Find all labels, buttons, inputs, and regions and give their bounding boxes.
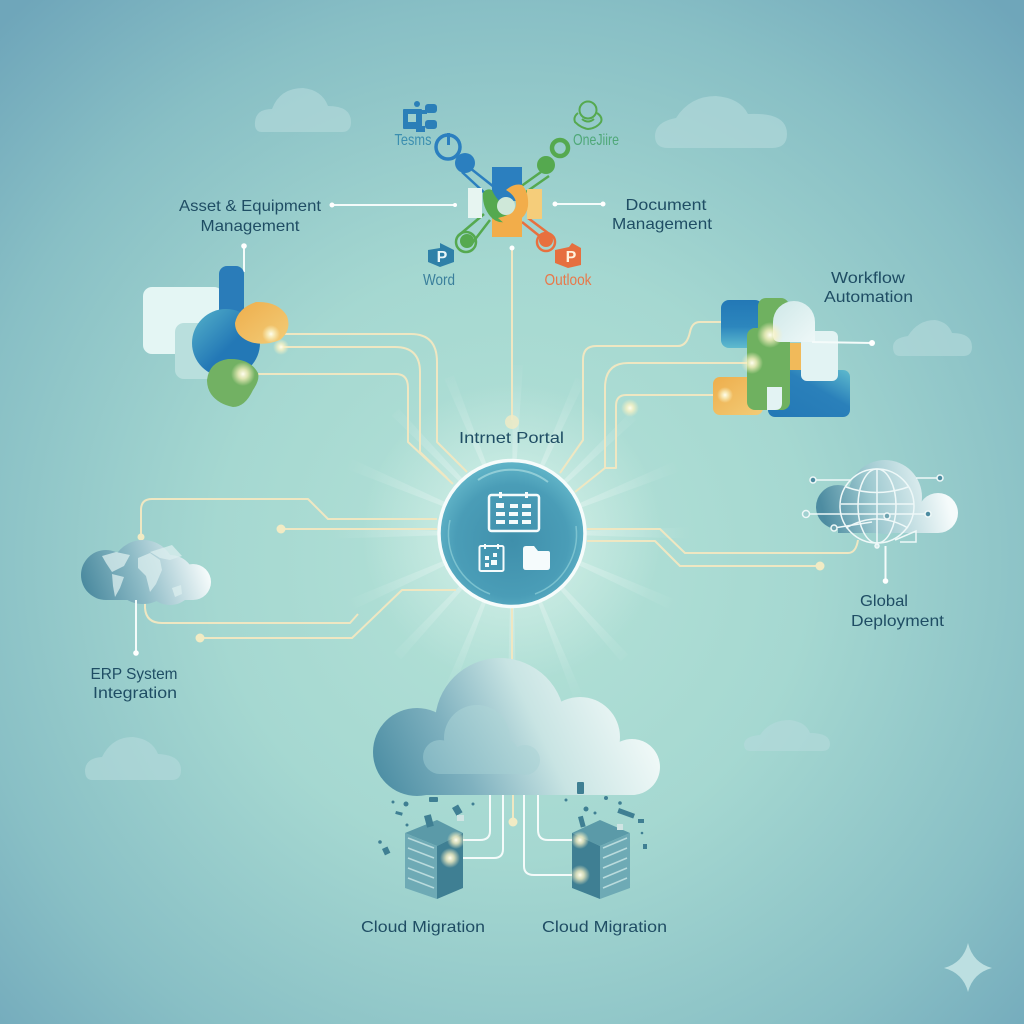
label: ERP System Integration: ERP System bbox=[90, 666, 178, 683]
traces: upper right bbox=[560, 322, 721, 473]
traces: upper left bbox=[271, 334, 467, 472]
label: Global Deployment: Global bbox=[860, 593, 908, 610]
server connector lines bbox=[450, 795, 580, 875]
label: Outlook: Outlook bbox=[544, 272, 592, 289]
light rays from hub bbox=[324, 365, 700, 721]
icon: connector nodes bbox=[436, 133, 568, 252]
trace: to top hub bbox=[511, 248, 513, 420]
label: Word: Word bbox=[423, 272, 455, 289]
cloud: bottom left bbox=[85, 737, 181, 780]
label: ERP System Integration: Integration bbox=[93, 685, 177, 702]
label: Teams: Tesms bbox=[394, 132, 432, 149]
label: Workflow Automation: Workflow bbox=[831, 270, 905, 287]
icon: large cloud bbox=[373, 658, 660, 796]
label: Cloud Migration left: Cloud Migration bbox=[361, 919, 485, 936]
label: Asset & Equipment Management: Management bbox=[200, 218, 300, 235]
line: portal top dot bbox=[510, 246, 514, 250]
icon group: Workflow Automation bbox=[713, 298, 875, 417]
cloud: bottom right bbox=[744, 720, 830, 751]
icon: Word bbox=[428, 243, 454, 267]
icon: folder bbox=[523, 546, 550, 570]
icon group: Asset & Equipment bbox=[143, 243, 289, 407]
label: Document Management: Document bbox=[626, 197, 707, 214]
label: Workflow Automation bbox=[824, 270, 913, 306]
line: document label connector bbox=[552, 202, 606, 206]
world map continents bbox=[102, 545, 182, 597]
circuit traces bbox=[138, 248, 858, 660]
cloud: top right bbox=[655, 96, 787, 148]
background clouds bbox=[85, 88, 972, 780]
inner cloud bbox=[423, 705, 540, 775]
label: OneDrive: OneJiire bbox=[573, 132, 619, 149]
label: Asset & Equipment Management: Asset & Equipment bbox=[179, 198, 322, 215]
label: Document Management bbox=[612, 197, 713, 233]
label: Workflow Automation: Automation bbox=[824, 289, 913, 306]
trace glow dots bbox=[505, 415, 519, 429]
icon: OneDrive person bbox=[574, 102, 602, 129]
migration debris bbox=[378, 782, 647, 855]
label: Cloud Migration right: Cloud Migration bbox=[542, 919, 667, 936]
icon: large calendar bbox=[489, 492, 539, 531]
label: Document Management: Management bbox=[612, 216, 713, 233]
icon: Outlook: P bbox=[566, 249, 577, 266]
icon group: ERP cloud bbox=[81, 540, 211, 656]
cloud: right bbox=[893, 320, 972, 356]
central hub: Intranet Portal bbox=[439, 460, 585, 606]
icon: server right bbox=[570, 820, 630, 899]
icon: small calendar bbox=[480, 544, 504, 571]
label: Global Deployment bbox=[851, 593, 945, 630]
label: Global Deployment: Deployment bbox=[851, 613, 945, 630]
icon: Word: P bbox=[437, 249, 448, 266]
trace: hub to cloud bbox=[511, 608, 513, 660]
traces: right bbox=[587, 529, 858, 553]
line: asset label connector bbox=[330, 202, 457, 208]
icon group: Global Deployment cloud and globe bbox=[802, 460, 958, 584]
connector arms bbox=[458, 168, 552, 246]
top cluster: Document Management bbox=[330, 133, 606, 252]
traces: left bbox=[141, 499, 437, 535]
icon: Teams bbox=[403, 101, 437, 132]
label: ERP System Integration bbox=[90, 666, 178, 702]
label: Intranet Portal: Intrnet Portal bbox=[459, 430, 564, 447]
icon: server left bbox=[405, 820, 465, 899]
label: Asset & Equipment Management bbox=[179, 198, 322, 235]
cloud: top left bbox=[255, 88, 351, 132]
icon: Outlook bbox=[555, 243, 581, 268]
icon: sparkle bbox=[944, 943, 992, 992]
center logo shapes bbox=[468, 167, 542, 237]
